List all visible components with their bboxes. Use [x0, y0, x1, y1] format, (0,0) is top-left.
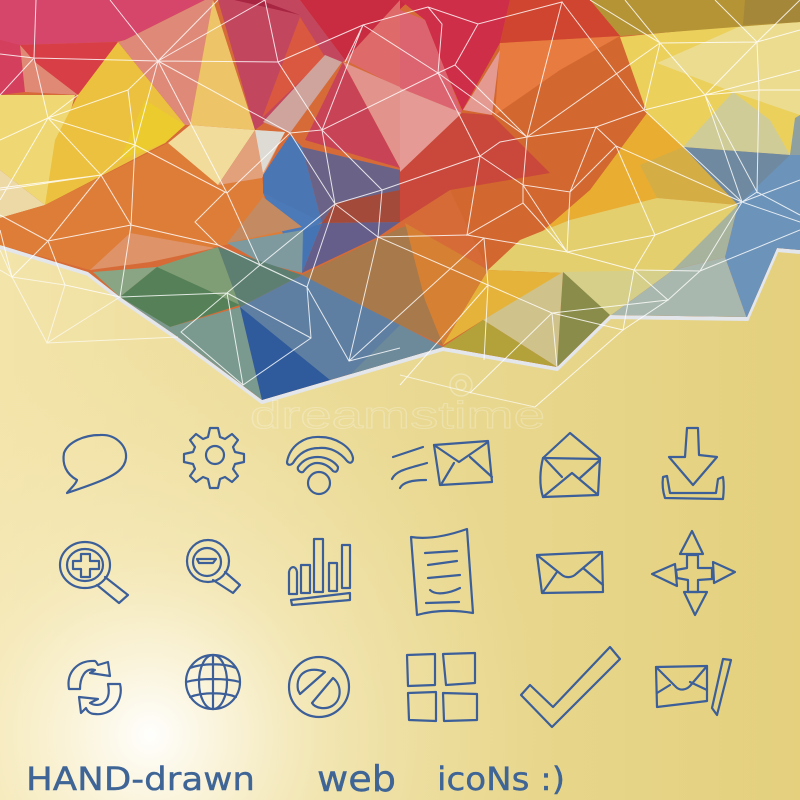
- white wire mesh: [0, 0, 800, 407]
- icon: wifi: [287, 437, 353, 494]
- banner edge highlight: [0, 247, 800, 402]
- icon: envelope: [537, 552, 603, 593]
- icon: fast mail: [392, 441, 492, 488]
- icon: globe: [186, 655, 240, 709]
- icon: zoom out: [187, 540, 240, 593]
- icon: grid of squares: [407, 653, 477, 721]
- faint watermark: [250, 374, 545, 437]
- caption: hand-drawn web icons: web: [317, 759, 396, 800]
- caption: hand-drawn web icons: [26, 759, 565, 800]
- icon: bar chart: [289, 539, 350, 605]
- icon: zoom in: [60, 542, 128, 603]
- icon: check mark: [521, 647, 620, 727]
- caption: hand-drawn web icons: HAND-drawn: [26, 760, 255, 798]
- icon: refresh: [69, 661, 121, 714]
- icon: document: [411, 529, 473, 615]
- low-poly colour banner: [0, 0, 800, 437]
- icon: envelope with pencil: [656, 659, 731, 715]
- icon: four-way arrows: [652, 531, 735, 615]
- icon: open envelope: [540, 433, 600, 497]
- faint watermark: dreamstime: [250, 395, 545, 437]
- icon: gear: [184, 428, 244, 488]
- icon: speech bubble: [64, 435, 126, 493]
- icon: download: [663, 428, 724, 499]
- polygon facets: [0, 0, 800, 410]
- caption: hand-drawn web icons: icoNs :): [437, 760, 565, 798]
- icon: prohibited: [289, 657, 349, 717]
